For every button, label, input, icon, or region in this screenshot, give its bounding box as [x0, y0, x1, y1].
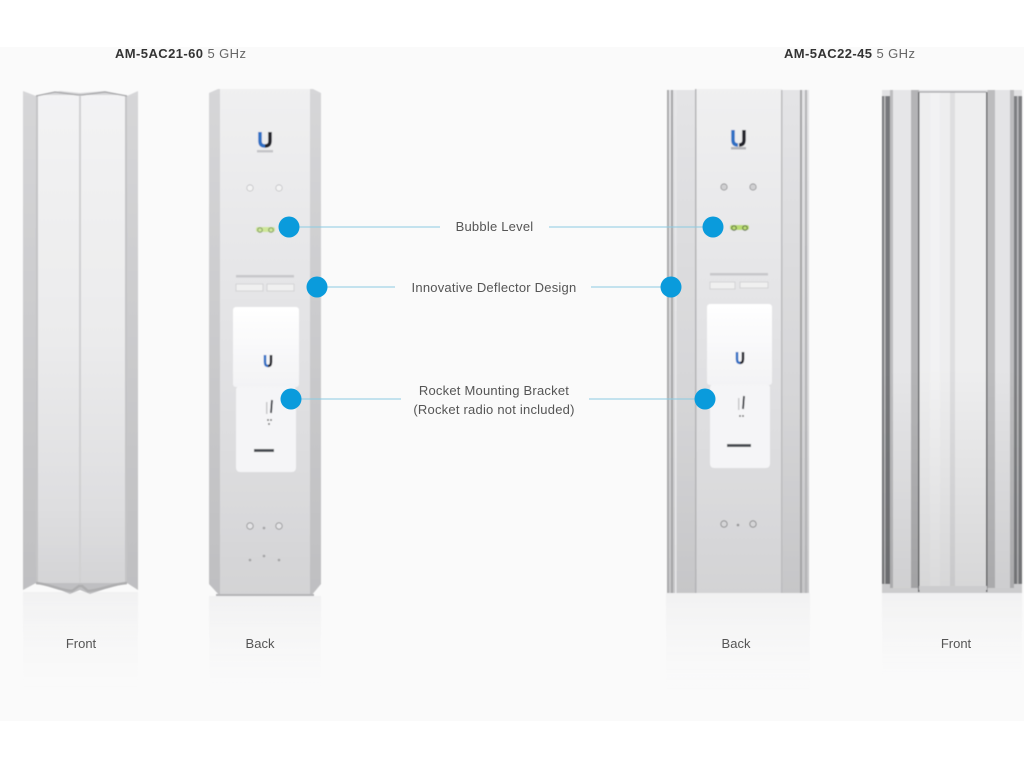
caption: Back left: Back — [246, 636, 275, 651]
callout: Rocket Mounting Bracket: (Rocket radio not included) — [413, 402, 575, 417]
mounting screws lower — [721, 521, 756, 527]
callout: Bubble Level: Bubble Level — [456, 219, 533, 234]
model heading: AM-5AC21-60: AM-5AC21-60 5 GHz — [115, 46, 246, 61]
caption: Back right: Back — [722, 636, 751, 651]
callout: Bubble Level — [278, 216, 724, 238]
rocket mounting bracket — [233, 307, 299, 472]
caption: Front right: Front — [941, 636, 972, 651]
rocket mounting bracket — [707, 304, 772, 468]
callout: Rocket Mounting Bracket: Rocket Mounting Bracket — [419, 383, 569, 398]
callout: Innovative Deflector Design — [306, 276, 682, 298]
model heading: AM-5AC22-45: AM-5AC22-45 5 GHz — [784, 46, 915, 61]
caption: Front left: Front — [66, 636, 97, 651]
logo: U mark — [257, 132, 273, 152]
antenna: AM-5AC22-45 back — [666, 89, 810, 703]
antenna: AM-5AC21-60 front — [23, 91, 138, 704]
antenna: AM-5AC22-45 front — [882, 90, 1022, 693]
mounting screws upper — [721, 184, 756, 190]
logo: U mark — [731, 130, 746, 150]
product label — [710, 273, 768, 289]
antenna: AM-5AC21-60 back — [209, 89, 321, 704]
callout: Innovative Deflector Design: Innovative Deflector Design — [412, 280, 576, 295]
bubble level — [730, 225, 749, 230]
product label — [236, 275, 294, 291]
mounting screws lower — [247, 523, 282, 561]
mounting screws upper — [247, 185, 282, 191]
bubble level — [256, 227, 275, 232]
callout: Rocket Mounting Bracket — [280, 383, 716, 417]
